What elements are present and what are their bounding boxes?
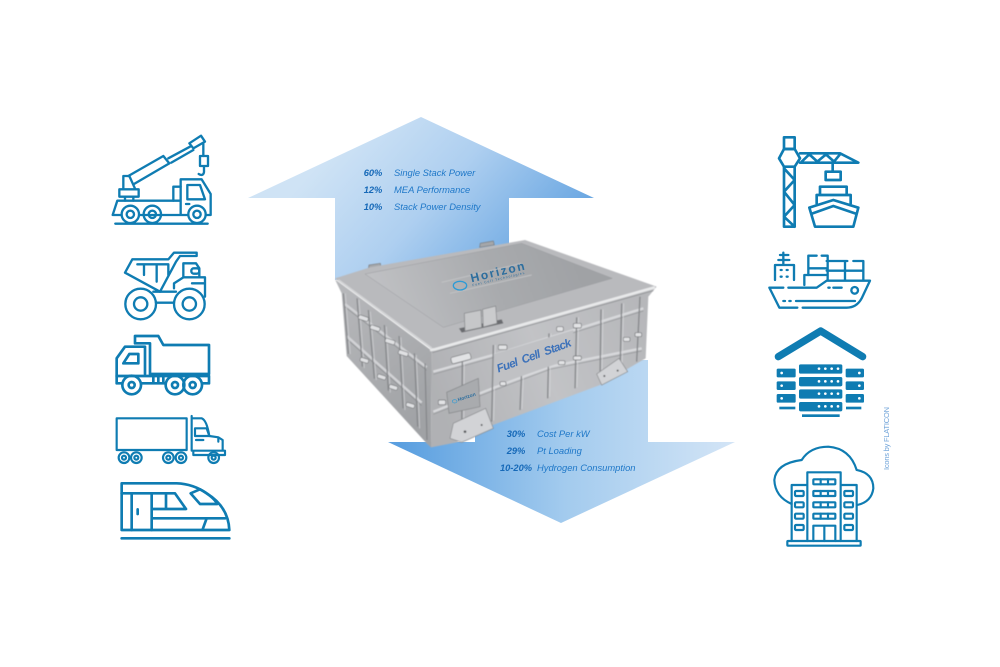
text: lower metrics: Hydrogen Consumption xyxy=(537,462,636,473)
lid lines xyxy=(442,263,532,293)
fuel cell stack text: Fuel Cell Stack xyxy=(495,336,574,375)
horizon logo on lid: Fuel Cell Technologies xyxy=(472,271,525,287)
text: upper metrics: MEA Performance xyxy=(394,184,470,195)
text: upper metrics: 60% xyxy=(364,168,382,178)
icon: mobile crane xyxy=(113,136,211,224)
arrow: up xyxy=(248,117,594,280)
icon: container ship xyxy=(769,253,870,308)
text: lower metrics xyxy=(500,428,636,473)
mounting feet xyxy=(450,358,628,442)
left face xyxy=(335,279,432,447)
icon: tower crane and cargo ship xyxy=(779,137,858,227)
front lip xyxy=(430,287,655,350)
connectors xyxy=(438,323,642,405)
text: lower metrics: Pt Loading xyxy=(537,445,583,456)
icon: high speed train xyxy=(122,483,229,538)
text: upper metrics: 12% xyxy=(364,185,382,195)
horizon badge on front: Horizon xyxy=(457,392,477,403)
icon: dump truck xyxy=(117,336,209,394)
text: lower metrics: 29% xyxy=(506,446,525,456)
lid panel xyxy=(365,243,612,327)
fuel cell stack xyxy=(335,240,657,447)
label plate xyxy=(493,330,573,386)
top frame xyxy=(335,240,657,349)
horizon logo on lid: Horizon xyxy=(469,259,526,285)
text: upper metrics: 10% xyxy=(364,202,382,212)
horizon logo on lid xyxy=(453,259,526,290)
icon: semi truck xyxy=(117,416,225,463)
text: upper metrics xyxy=(364,167,482,212)
front face bands xyxy=(433,297,643,432)
icon: data center xyxy=(777,331,864,417)
text: lower metrics: 10-20% xyxy=(500,463,532,473)
arrow: down xyxy=(388,360,735,523)
icon: cloud building xyxy=(774,447,873,546)
text: upper metrics: Single Stack Power xyxy=(394,167,476,178)
text: upper metrics: Stack Power Density xyxy=(394,201,482,212)
text: lower metrics: 30% xyxy=(507,429,525,439)
left face bands xyxy=(343,293,427,440)
lifting tabs xyxy=(368,241,494,269)
left connectors xyxy=(358,315,415,409)
icon: mining dump truck xyxy=(125,253,205,319)
badge plate xyxy=(447,378,480,413)
front face xyxy=(431,287,657,447)
credit: icons by flaticon: Icons by FLATICON xyxy=(882,407,891,470)
box body artwork xyxy=(335,240,657,447)
lid handle xyxy=(459,319,503,333)
text: lower metrics: Cost Per kW xyxy=(537,428,591,439)
